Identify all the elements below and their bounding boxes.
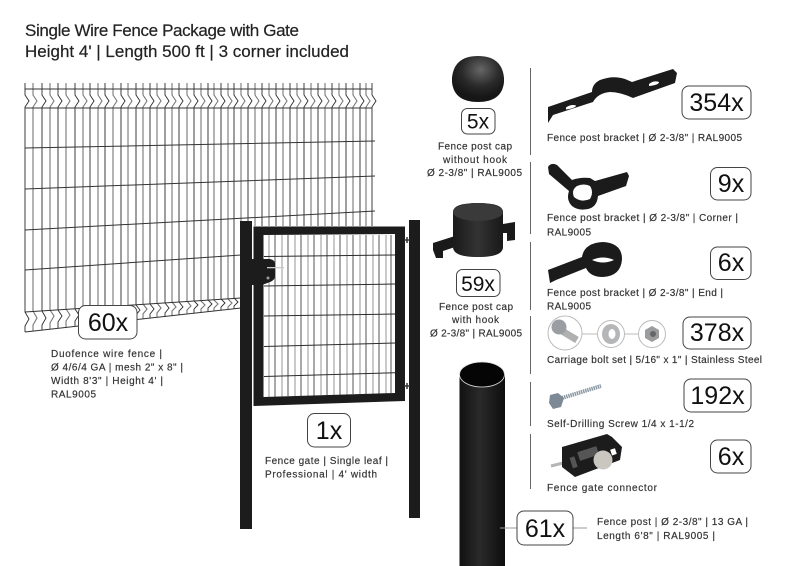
- text: cap with hook: Fence post cap: [439, 302, 513, 313]
- icon: fence post cap without hook: [452, 56, 504, 102]
- text: corner bracket: Fence post bracket | Ø 2-3/8" | Corner |: [547, 213, 738, 224]
- gate latch: [252, 259, 275, 285]
- badge 61x: [517, 511, 573, 545]
- badge 378x: [683, 317, 751, 349]
- badge 192x: 192x: [690, 382, 745, 410]
- badge 5x: [462, 108, 495, 134]
- icon: self-drilling screw: [549, 386, 601, 409]
- badge 6x gate connector: 6x: [718, 443, 745, 471]
- title: Height 4' | Length 500 ft | 3 corner included: [25, 42, 349, 61]
- badge 9x: 9x: [718, 170, 745, 198]
- gate right post: [409, 220, 420, 518]
- text: wire fence: RAL9005: [51, 390, 96, 400]
- text: cap without hook: without hook: [442, 155, 508, 166]
- fence panel illustration: [25, 83, 376, 332]
- icon: fence gate connector: [551, 434, 622, 477]
- badge 5x: 5x: [467, 110, 490, 134]
- text: corner bracket: [547, 213, 738, 238]
- gate left post: [240, 221, 252, 529]
- text: cap with hook: with hook: [451, 315, 500, 326]
- badge 9x: [710, 168, 751, 200]
- text: cap without hook: Fence post cap: [438, 142, 512, 152]
- text: cap without hook: [427, 142, 522, 179]
- text: corner bracket: RAL9005: [547, 228, 591, 238]
- badge 1x: 1x: [316, 417, 343, 445]
- text: fence post: Fence post | Ø 2-3/8" | 13 GA |: [597, 517, 748, 528]
- text: fence gate: Fence gate | Single leaf |: [265, 456, 388, 467]
- title: Single Wire Fence Package with Gate: [25, 21, 299, 40]
- garden gate with posts: [240, 220, 420, 529]
- icon: fence post bracket: [548, 69, 677, 123]
- icon: fence post cap with hook: [433, 203, 515, 258]
- text: fence gate: Professional | 4' width: [265, 470, 377, 480]
- badge 60x: [78, 306, 137, 339]
- badge 378x: 378x: [690, 319, 745, 347]
- badge 59x: [456, 270, 500, 296]
- text: carriage bolt set: Carriage bolt set | 5/16" x 1" | Stainless Steel: [547, 355, 762, 366]
- badge 6x: 6x: [718, 249, 745, 277]
- fence post: [460, 362, 505, 566]
- text: end bracket: RAL9005: [547, 302, 591, 312]
- icon: end bracket: [548, 242, 622, 283]
- badge 60x: 60x: [88, 309, 129, 337]
- text: end bracket: Fence post bracket | Ø 2-3/8" | End |: [547, 288, 723, 299]
- text: end bracket: [547, 288, 723, 312]
- badge 354x: [682, 86, 751, 119]
- text: wire fence: Ø 4/6/4 GA | mesh 2" x 8" |: [51, 362, 183, 374]
- badge 1x: [308, 414, 350, 447]
- icon: carriage bolt set: [548, 316, 666, 350]
- badge 61x: 61x: [525, 515, 566, 543]
- text: post bracket: Fence post bracket | Ø 2-3/8" | RAL9005: [547, 133, 742, 144]
- text: fence gate: [265, 456, 388, 480]
- text: screw: Self-Drilling Screw 1/4 x 1-1/2: [547, 419, 694, 430]
- badge 6x gate connector: [710, 440, 751, 473]
- badge 354x: 354x: [689, 89, 744, 117]
- badge 59x: 59x: [461, 273, 495, 296]
- gate mesh: [264, 235, 395, 397]
- text: cap with hook: Ø 2-3/8" | RAL9005: [430, 328, 522, 340]
- dividers: [530, 68, 532, 489]
- text: wire fence: Width 8'3" | Height 4' |: [51, 376, 163, 387]
- badge 6x: [710, 247, 751, 280]
- gate frame: [254, 226, 405, 406]
- text: wire fence: [51, 349, 183, 400]
- connector line: [500, 527, 587, 529]
- title: [25, 21, 349, 61]
- text: gate connector: Fence gate connector: [547, 483, 658, 494]
- icon: corner bracket: [548, 164, 629, 210]
- text: cap with hook: [430, 302, 522, 340]
- text: wire fence: Duofence wire fence |: [51, 349, 162, 360]
- badge 192x: [684, 379, 751, 412]
- gate hinges: [404, 237, 410, 389]
- text: fence post: Length 6'8" | RAL9005 |: [597, 531, 715, 542]
- text: cap without hook: Ø 2-3/8" | RAL9005: [427, 168, 522, 179]
- text: fence post: [597, 517, 748, 542]
